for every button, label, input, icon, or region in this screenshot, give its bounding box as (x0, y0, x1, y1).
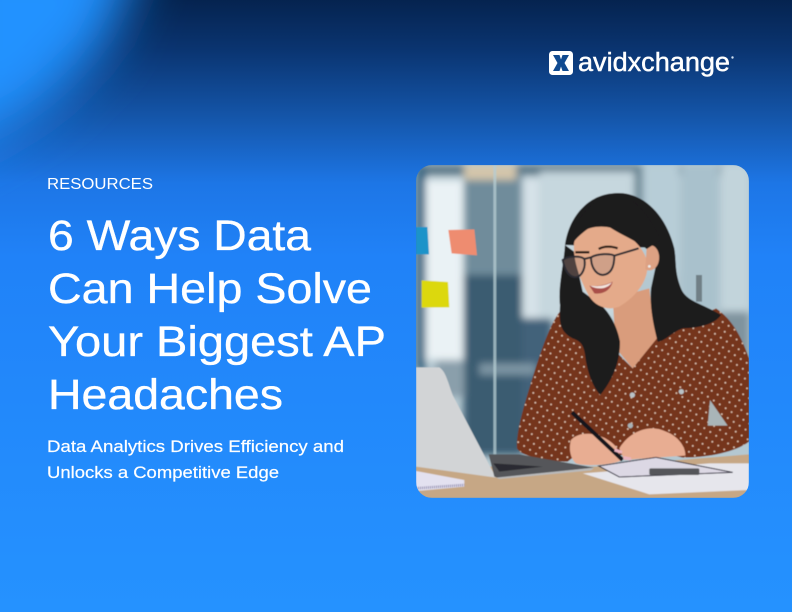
papers and clipboard (583, 457, 749, 494)
wordmark: avidxchange (578, 49, 730, 77)
laptop (416, 367, 594, 479)
sticky notes (416, 227, 477, 308)
subtitle: Unlocks a Competitive Edge (47, 463, 279, 482)
face (574, 227, 648, 308)
title: 6 Ways Data (48, 212, 311, 260)
brows, eyes, smile (575, 247, 618, 252)
woman (517, 193, 749, 465)
title: Your Biggest AP (48, 318, 386, 366)
ear (645, 245, 659, 270)
hands (570, 434, 623, 465)
title (48, 212, 386, 419)
title: Headaches (48, 371, 283, 419)
notebook (416, 471, 464, 491)
photo: woman smiling at laptop at an office desk (416, 165, 749, 498)
hair right (650, 246, 722, 342)
hair left (559, 245, 620, 395)
hair front (574, 226, 652, 250)
pen (572, 412, 623, 460)
subtitle (47, 437, 344, 482)
eyebrow: RESOURCES: RESOURCES (47, 176, 153, 193)
title: Can Help Solve (48, 265, 372, 313)
subtitle: Data Analytics Drives Efficiency and (47, 437, 344, 456)
neck and chest (613, 288, 661, 368)
glasses (563, 248, 639, 277)
logo: avidxchange (549, 49, 734, 77)
blouse (517, 308, 749, 462)
icon: logo mark (549, 51, 573, 75)
hair back (565, 193, 674, 248)
desk (416, 454, 749, 498)
office background (416, 165, 749, 498)
